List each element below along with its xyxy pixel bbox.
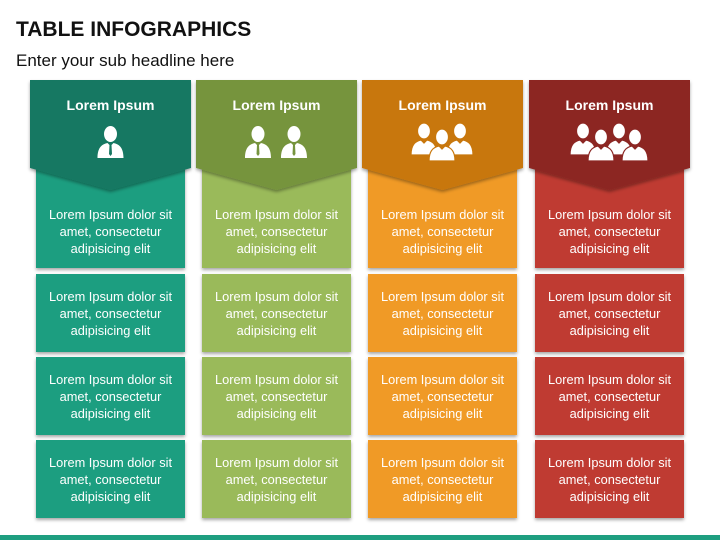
cell texts: amet, consectetur [60,389,162,404]
column 4: Lorem Ipsum [566,97,653,113]
cell texts: adipisicing elit [71,323,151,338]
cell texts: amet, consectetur [392,224,494,239]
column 3: Lorem Ipsum [399,97,486,113]
cell texts: adipisicing elit [403,323,483,338]
cells column 2 [202,165,351,518]
header column 2 [196,80,357,190]
cell texts: amet, consectetur [226,472,328,487]
cells column 4 [535,165,684,518]
cell texts: Lorem Ipsum dolor sit [548,289,671,304]
bottom bar [0,535,720,540]
icon: three persons [411,123,473,161]
cell texts: adipisicing elit [403,489,483,504]
cell texts: Lorem Ipsum dolor sit [548,372,671,387]
cells column 1 [36,165,185,518]
cell texts: amet, consectetur [226,389,328,404]
header column 4 [529,80,690,190]
cell texts: Lorem Ipsum dolor sit [215,372,338,387]
icon: two persons [245,126,307,158]
cell texts: adipisicing elit [570,323,650,338]
cell texts: amet, consectetur [60,224,162,239]
cell texts: amet, consectetur [392,472,494,487]
cell texts: adipisicing elit [403,406,483,421]
cell texts: amet, consectetur [559,224,661,239]
cell texts: Lorem Ipsum dolor sit [381,455,504,470]
cell texts: amet, consectetur [559,306,661,321]
cell texts: adipisicing elit [237,241,317,256]
cell texts: Lorem Ipsum dolor sit [49,455,172,470]
cell texts: amet, consectetur [226,224,328,239]
cell texts: adipisicing elit [237,406,317,421]
header column 1 [30,80,191,190]
cell texts: Lorem Ipsum dolor sit [381,289,504,304]
icon: one person [98,126,124,158]
cell texts: amet, consectetur [559,472,661,487]
cell texts: adipisicing elit [237,323,317,338]
cell texts: Lorem Ipsum dolor sit [49,289,172,304]
column 1: Lorem Ipsum [67,97,154,113]
cell texts: Lorem Ipsum dolor sit [215,207,338,222]
cell texts: Lorem Ipsum dolor sit [548,455,671,470]
column 2 [196,80,357,518]
column 2: Lorem Ipsum [233,97,320,113]
cell texts: adipisicing elit [71,406,151,421]
cell texts: Lorem Ipsum dolor sit [381,207,504,222]
cell texts: Lorem Ipsum dolor sit [215,455,338,470]
title: TABLE INFOGRAPHICS [16,18,251,41]
cell texts: amet, consectetur [60,472,162,487]
cell texts: amet, consectetur [559,389,661,404]
header column 3 [362,80,523,190]
column 3 [362,80,523,518]
cell texts: amet, consectetur [226,306,328,321]
cell texts: Lorem Ipsum dolor sit [381,372,504,387]
column 4 [529,80,690,518]
cell texts: amet, consectetur [392,389,494,404]
icon: four persons [570,123,648,161]
cell texts: Lorem Ipsum dolor sit [548,207,671,222]
cell texts: Lorem Ipsum dolor sit [49,372,172,387]
cells column 3 [368,165,517,518]
cell texts: adipisicing elit [71,489,151,504]
cell texts: Lorem Ipsum dolor sit [49,207,172,222]
cell texts: adipisicing elit [570,406,650,421]
cell texts: amet, consectetur [392,306,494,321]
subtitle: Enter your sub headline here [16,51,234,70]
cell texts: adipisicing elit [403,241,483,256]
cell texts [49,207,671,504]
cell texts: amet, consectetur [60,306,162,321]
column 1 [30,80,191,518]
cell texts: Lorem Ipsum dolor sit [215,289,338,304]
cell texts: adipisicing elit [71,241,151,256]
cell texts: adipisicing elit [570,241,650,256]
cell texts: adipisicing elit [237,489,317,504]
cell texts: adipisicing elit [570,489,650,504]
